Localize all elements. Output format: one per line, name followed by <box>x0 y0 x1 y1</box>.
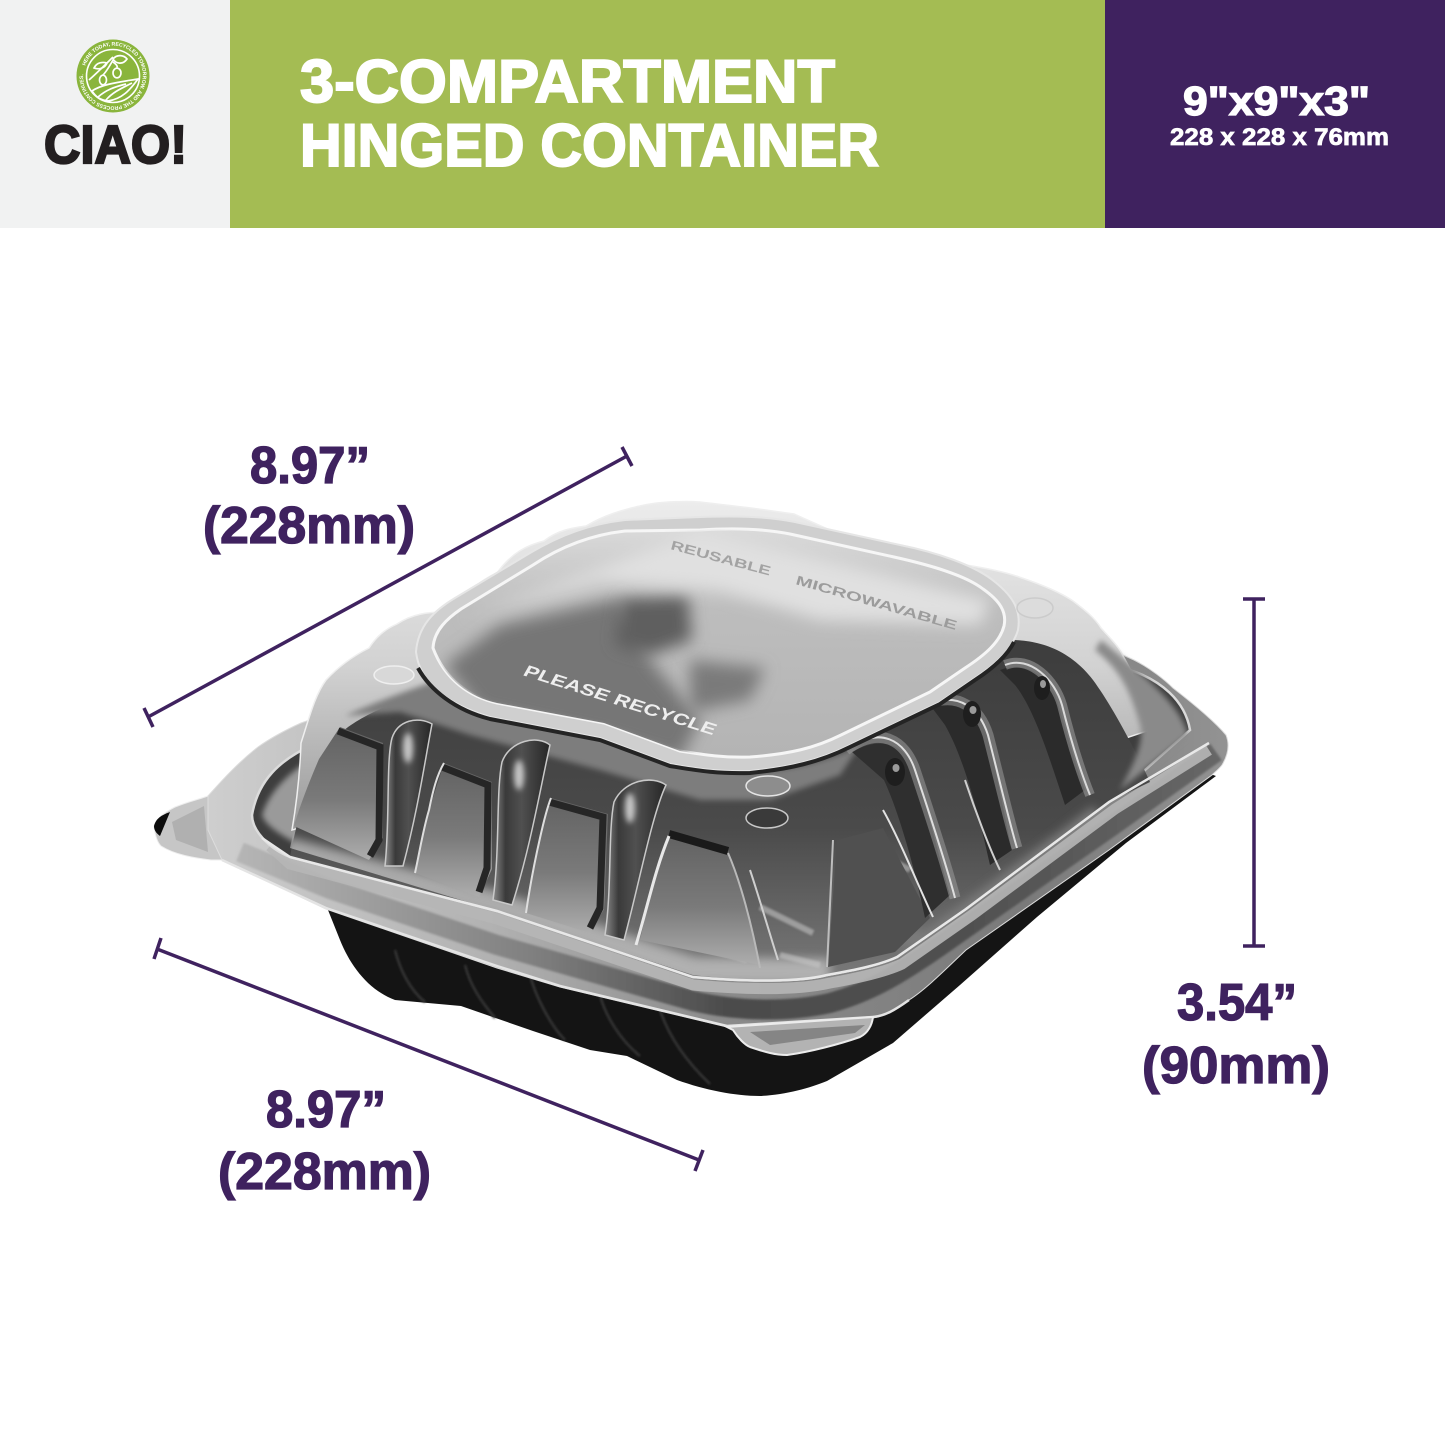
rib 3 <box>605 780 666 940</box>
panel 1 <box>294 727 383 860</box>
logo: CIAO <box>44 40 187 175</box>
front rim dark stripe <box>240 752 1216 1010</box>
front panels <box>294 727 930 968</box>
panel 4 <box>636 834 760 968</box>
size summary: 228 x 228 x 76mm <box>1170 124 1389 151</box>
dimension label: 3.54” <box>1177 974 1297 1032</box>
side panel near corner <box>828 828 930 967</box>
size summary <box>1170 78 1389 151</box>
translucent dome upper <box>292 501 1150 830</box>
lid top recess rim <box>416 517 1019 771</box>
front hinge tab <box>727 1017 873 1055</box>
rib B <box>930 701 1012 865</box>
logo wordmark: CIAO! <box>44 115 187 175</box>
corner edge line <box>827 840 833 967</box>
embossed text: please recycle: PLEASE RECYCLE <box>520 662 720 739</box>
size summary: 9"x9"x3" <box>1183 78 1370 124</box>
panel: title background <box>230 0 1105 228</box>
dimension label: (228mm) <box>218 1143 431 1201</box>
rib 1 <box>385 720 432 866</box>
dimension label <box>218 1081 431 1201</box>
rib highlights <box>403 733 635 823</box>
title: 3-COMPARTMENT <box>300 48 835 115</box>
panel: size background <box>1105 0 1445 228</box>
window shading <box>445 530 990 760</box>
rim outer edge <box>208 600 1228 1027</box>
embossed text: microwavable: MICROWAVABLE <box>794 572 959 633</box>
front rim light inner band <box>270 750 1209 989</box>
shoulder band under lid <box>345 682 860 800</box>
rib A <box>852 744 950 918</box>
rib 2 <box>493 740 550 905</box>
translucent inner left floor <box>262 760 310 845</box>
rib orbs <box>885 676 1050 786</box>
icon: round olive badge: HERE TODAY, RECYCLED TOMORROW. AND THE PROCESS CONTINUES. <box>80 42 146 110</box>
dimension label: 8.97” <box>250 437 370 495</box>
lid buttons <box>374 598 1053 828</box>
dimension label: (90mm) <box>1142 1037 1330 1095</box>
lid lower dark edge <box>418 642 1014 773</box>
dimension: front width <box>154 938 703 1201</box>
dome dark walls <box>290 640 1150 981</box>
dimension line <box>154 938 703 1171</box>
title: HINGED CONTAINER <box>300 112 879 179</box>
rib C <box>1000 667 1085 805</box>
front inner rim highlight <box>262 743 1209 981</box>
black base tray <box>222 700 1216 1096</box>
front ribs <box>385 720 666 940</box>
embossed text: reusable: REUSABLE <box>669 537 773 579</box>
panel: logo background <box>0 0 230 228</box>
dimension label: 8.97” <box>266 1081 386 1139</box>
dimension label <box>203 437 415 555</box>
product photo: hinged container <box>154 501 1228 1096</box>
dimension label <box>1142 974 1330 1095</box>
panel 2 <box>415 763 492 897</box>
right wall thin edges <box>750 780 1000 960</box>
lid window <box>433 529 1005 760</box>
dimension: back width <box>144 437 632 727</box>
dimension: height <box>1142 599 1330 1095</box>
dimension label: (228mm) <box>203 497 415 555</box>
left hinge tab <box>154 796 240 860</box>
dimension line <box>144 447 632 727</box>
header banner <box>0 0 1445 228</box>
front rim bright lower edge <box>222 860 909 1026</box>
right shoulder glass <box>1095 640 1188 790</box>
dimension line <box>1243 599 1265 946</box>
front wall reflections <box>285 815 1100 972</box>
rim inner channel <box>252 670 1190 981</box>
right side ribs <box>750 663 1090 960</box>
panel 3 <box>526 798 608 933</box>
title <box>300 48 879 179</box>
